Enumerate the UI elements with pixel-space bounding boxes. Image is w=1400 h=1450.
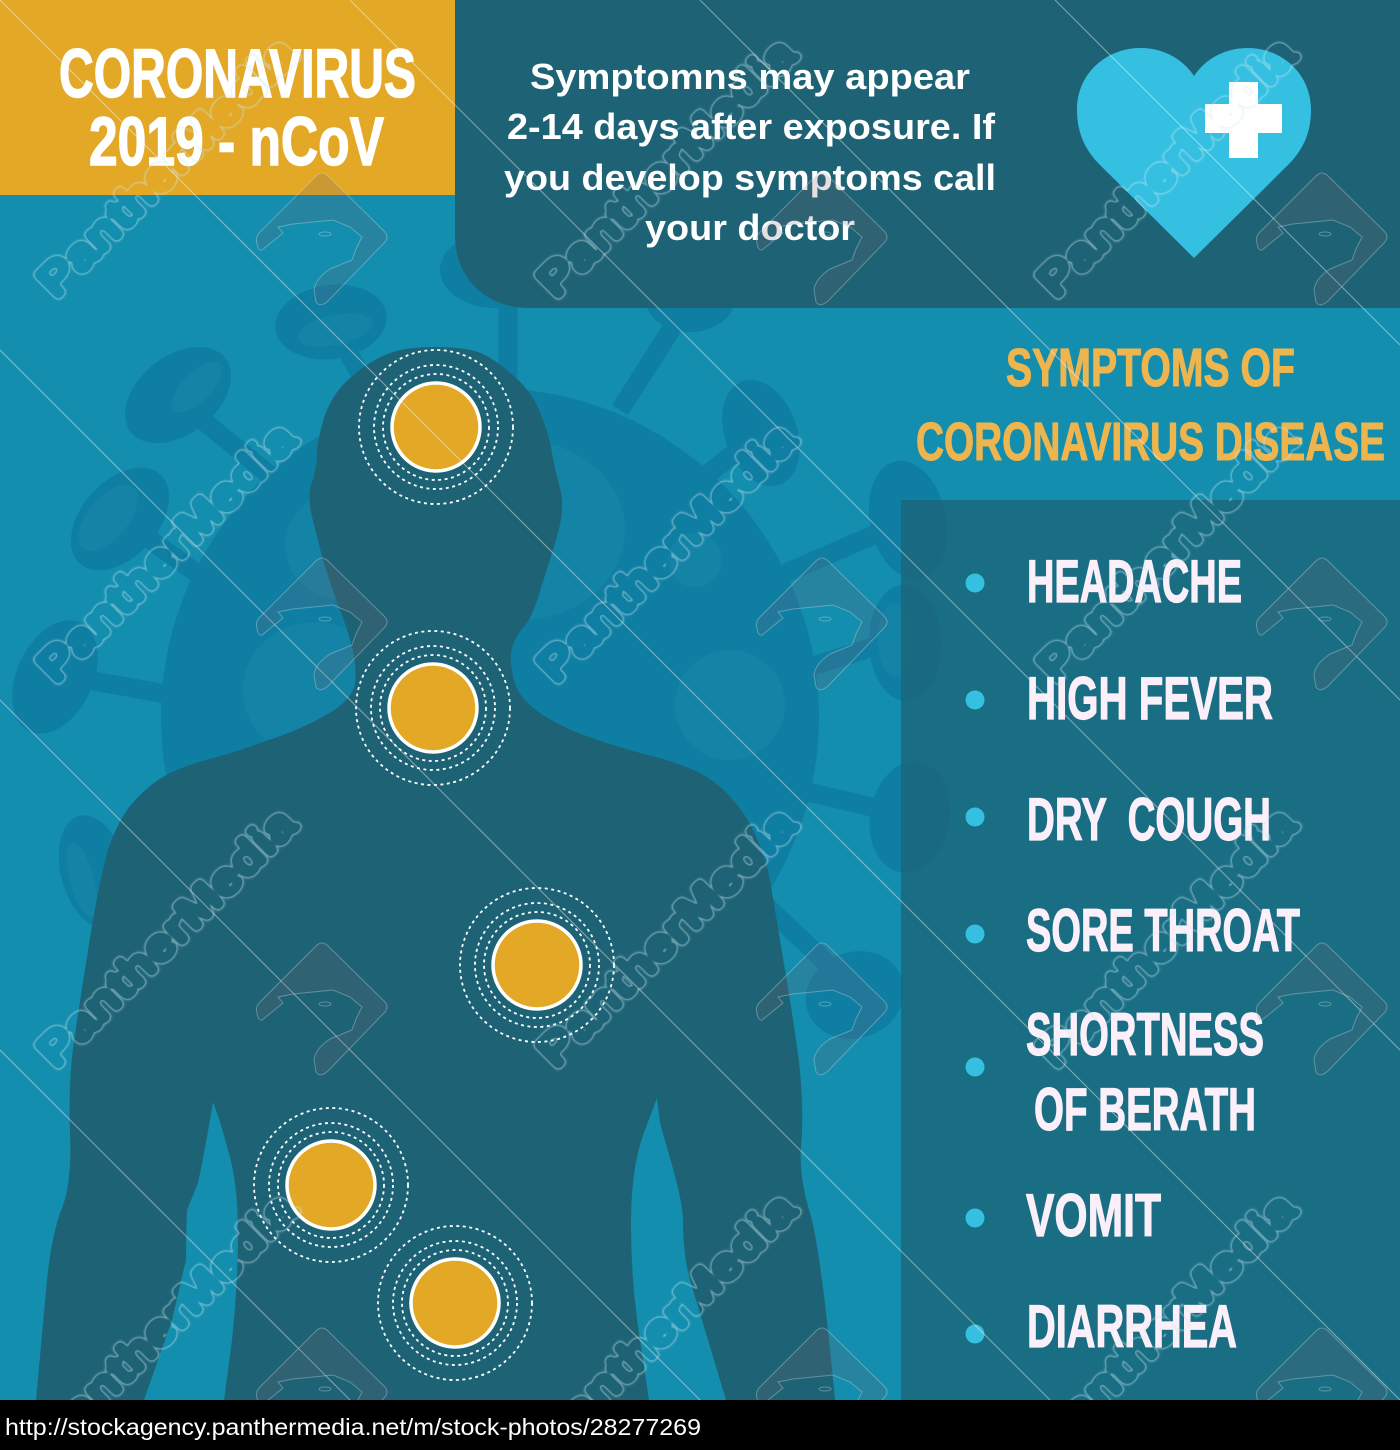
watermark text: PantherMedia (1026, 797, 1307, 1077)
symptom: headache: HEADACHE (1027, 548, 1242, 615)
symptom: shortness of breath: SHORTNESS (1026, 1001, 1264, 1068)
watermark text: PantherMedia (526, 797, 807, 1077)
panel: title background (0, 0, 455, 195)
symptom marker: lower abdomen (378, 1226, 532, 1380)
symptom: vomit: VOMIT (1026, 1182, 1161, 1249)
symptom marker: upper abdomen (254, 1108, 408, 1262)
footer source bar: http://stockagency.panthermedia.net/m/stock-photos/28277269 (5, 1414, 701, 1440)
symptom: high fever: HIGH FEVER (1027, 665, 1273, 732)
advice text: 2-14 days after exposure. If (507, 106, 996, 147)
symptom: high fever (966, 665, 1273, 732)
watermark text: PantherMedia (526, 412, 807, 692)
advice text: your doctor (645, 207, 855, 248)
heading: symptoms of coronavirus disease (916, 338, 1385, 472)
virus illustration (0, 232, 959, 1053)
symptom: shortness of breath: OF BERATH (1034, 1076, 1256, 1143)
symptom: vomit (966, 1182, 1161, 1249)
human body silhouette (36, 347, 835, 1400)
symptom: headache (966, 548, 1242, 615)
advice text: Symptomns may appear (530, 56, 970, 97)
title: 2019 - nCoV (89, 103, 384, 180)
symptom: dry cough: DRY COUGH (1027, 786, 1271, 853)
symptom marker: head (359, 350, 513, 504)
watermark text: PantherMedia (1026, 412, 1307, 692)
advice text (504, 56, 996, 248)
watermark text: PantherMedia (26, 27, 307, 307)
symptom marker: throat (356, 631, 510, 785)
icon: heart with medical cross (1077, 48, 1311, 258)
symptom: sore throat (966, 897, 1300, 964)
watermark text: PantherMedia (1026, 27, 1307, 307)
watermark text: PantherMedia (526, 27, 807, 307)
title (59, 35, 416, 180)
watermark text: PantherMedia (26, 797, 307, 1077)
advice text: you develop symptoms call (504, 157, 996, 198)
title: CORONAVIRUS (59, 35, 416, 112)
watermark logos (256, 173, 1387, 1450)
footer source bar (0, 1400, 1400, 1450)
symptom: shortness of breath (966, 1001, 1264, 1143)
heading: symptoms of coronavirus disease: SYMPTOMS OF (1006, 338, 1295, 398)
symptom: diarrhea: DIARRHEA (1027, 1293, 1237, 1360)
watermark text: PantherMedia (26, 412, 307, 692)
panel: symptoms list (901, 500, 1400, 1400)
symptom: dry cough (966, 786, 1271, 853)
panel: advice header (455, 0, 1400, 308)
symptom marker: chest (460, 888, 614, 1042)
symptom: diarrhea (966, 1293, 1237, 1360)
